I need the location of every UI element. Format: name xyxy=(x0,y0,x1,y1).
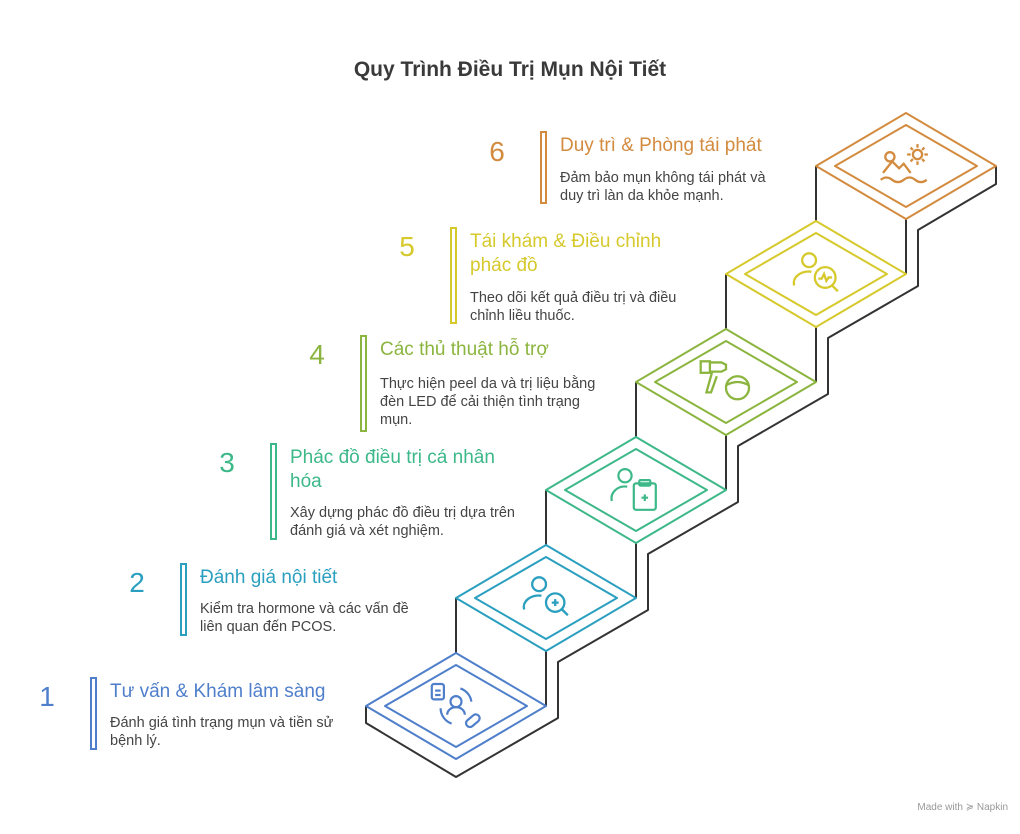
step 2 text: liên quan đến PCOS. xyxy=(200,619,336,635)
step 3 text xyxy=(219,444,515,539)
step 5 text xyxy=(399,228,676,324)
risers xyxy=(456,166,906,706)
title: Quy Trình Điều Trị Mụn Nội Tiết xyxy=(354,58,666,81)
step 1 text: 1 xyxy=(39,681,55,712)
step 6 text: Đảm bảo mụn không tái phát và xyxy=(560,170,766,186)
icon: procedures xyxy=(701,361,749,399)
icon: consultation xyxy=(432,684,481,729)
step 5 platform xyxy=(726,221,906,327)
icon: maintenance xyxy=(881,144,928,182)
step 3 text: Xây dựng phác đồ điều trị dựa trên xyxy=(290,505,515,521)
step 5 text: chỉnh liều thuốc. xyxy=(470,308,575,324)
step 2 text: 2 xyxy=(129,567,145,598)
step 4 text xyxy=(309,336,595,431)
icon: monitor xyxy=(794,253,838,291)
step 6 text: 6 xyxy=(489,136,505,167)
step 5 text: Tái khám & Điều chỉnh xyxy=(470,231,661,252)
step 2 text xyxy=(129,564,409,635)
step 3 text: hóa xyxy=(290,471,322,492)
step 5 text: 5 xyxy=(399,231,415,262)
stair shadow outline xyxy=(366,166,996,777)
step 5 text: phác đồ xyxy=(470,255,538,276)
step 4 text: đèn LED để cải thiện tình trạng xyxy=(380,394,580,410)
step 1 platform xyxy=(366,653,546,759)
staircase xyxy=(366,113,996,777)
step 4 platform xyxy=(636,329,816,435)
step 3 platform xyxy=(546,437,726,543)
step 3 text: đánh giá và xét nghiệm. xyxy=(290,523,444,539)
step 1 text: Tư vấn & Khám lâm sàng xyxy=(110,681,325,702)
icon: personal plan xyxy=(612,469,656,510)
step 6 text xyxy=(489,132,766,204)
step 6 text: Duy trì & Phòng tái phát xyxy=(560,135,762,156)
step 2 platform xyxy=(456,545,636,651)
step 3 text: Phác đồ điều trị cá nhân xyxy=(290,447,495,468)
step 3 text: 3 xyxy=(219,447,235,478)
step 1 text xyxy=(39,678,334,749)
step 1 text: Đánh giá tình trạng mụn và tiền sử xyxy=(110,715,334,731)
footer: made with napkin: Made with ≽ Napkin xyxy=(917,802,1008,813)
step 5 text: Theo dõi kết quả điều trị và điều xyxy=(470,290,676,306)
step 6 platform xyxy=(816,113,996,219)
step 2 text: Đánh giá nội tiết xyxy=(200,567,338,588)
step 2 text: Kiểm tra hormone và các vấn đề xyxy=(200,601,409,617)
step 4 text: Thực hiện peel da và trị liệu bằng xyxy=(380,375,595,392)
icon: hormone check xyxy=(524,577,568,615)
step 6 text: duy trì làn da khỏe mạnh. xyxy=(560,188,724,204)
step 4 text: Các thủ thuật hỗ trợ xyxy=(380,338,549,360)
step 4 text: 4 xyxy=(309,339,325,370)
step 1 text: bệnh lý. xyxy=(110,733,161,749)
step 4 text: mụn. xyxy=(380,412,412,428)
